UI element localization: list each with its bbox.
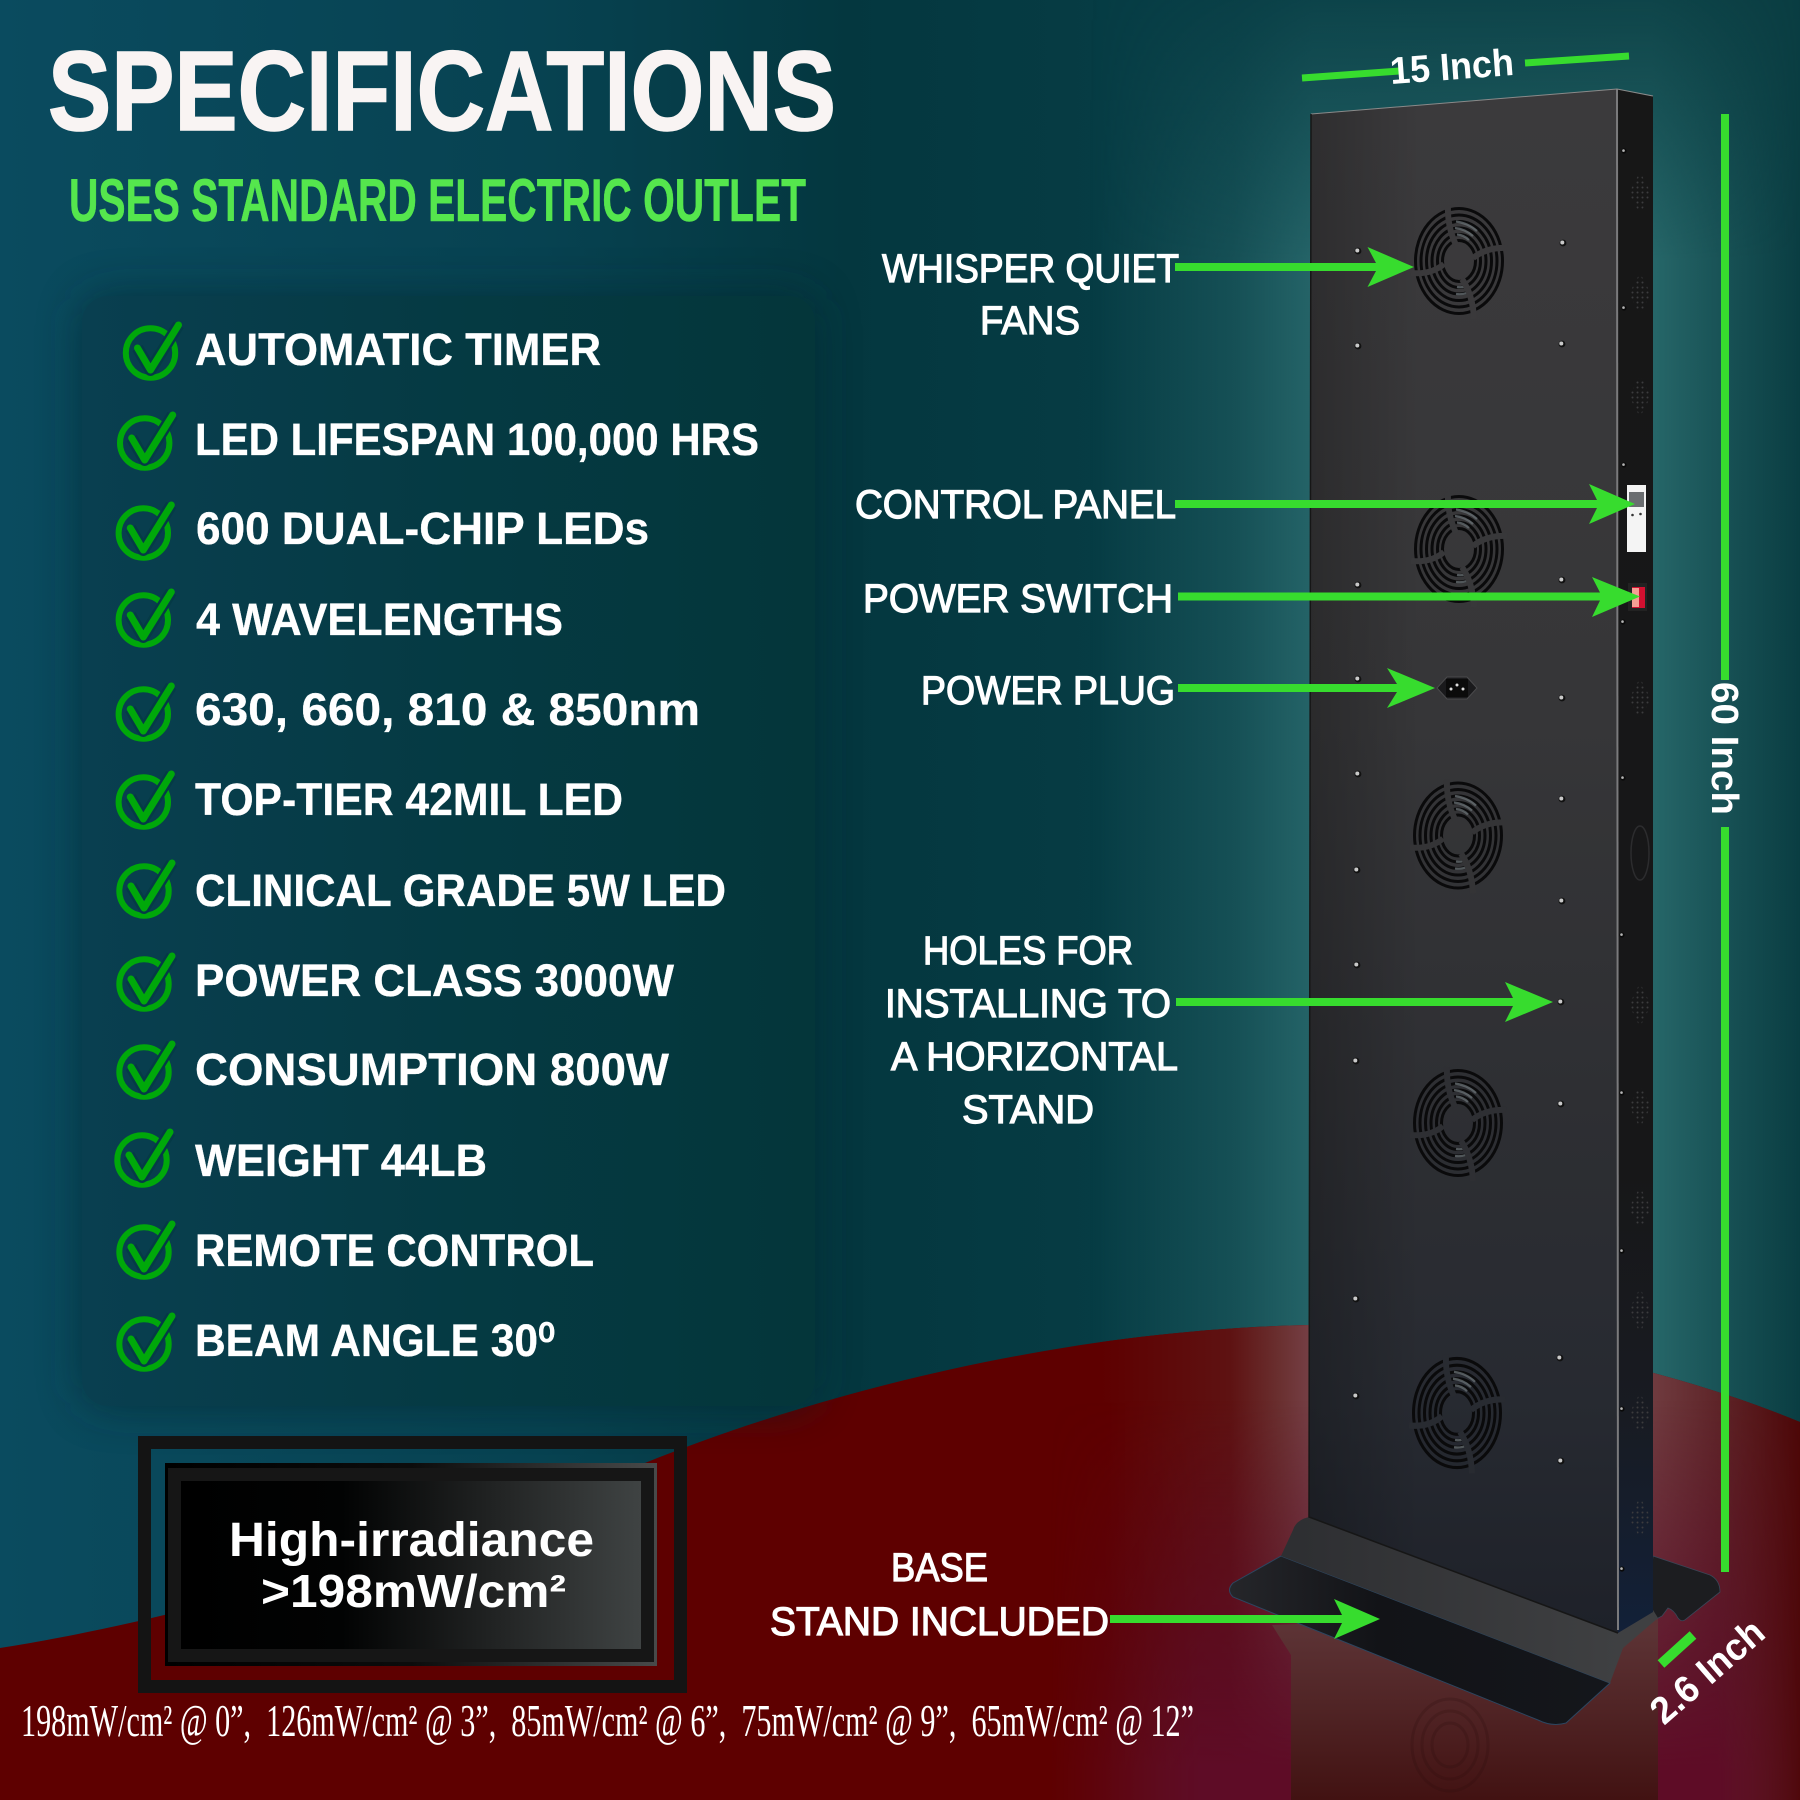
dimension: depth 2.6 inch: 2.6 Inch	[1642, 1611, 1773, 1733]
panel: specification list	[82, 296, 815, 1406]
spec: 5W LED: CLINICAL GRADE 5W LED	[195, 865, 726, 916]
arrow: fans	[1175, 247, 1414, 287]
spec: wavelengths: 4 WAVELENGTHS	[196, 594, 563, 645]
subtitle: USES STANDARD ELECTRIC OUTLET	[69, 167, 806, 234]
label: base stand: BASE	[891, 1546, 988, 1590]
power switch device	[1628, 583, 1647, 611]
spec: dual-chip LEDs: 600 DUAL-CHIP LEDs	[196, 503, 649, 554]
arrow: base	[1110, 1599, 1380, 1639]
product: LED panel on base stand	[1230, 89, 1720, 1800]
spec: remote control: REMOTE CONTROL	[195, 1225, 594, 1276]
fan 2	[1411, 493, 1507, 607]
front base foot	[1230, 1556, 1610, 1724]
callout: high irradiance box	[144, 1442, 680, 1686]
label: whisper quiet fans: FANS	[980, 299, 1080, 343]
dimension: height 60 inch: 60 Inch	[1703, 682, 1745, 815]
spec: automatic timer: AUTOMATIC TIMER	[195, 324, 601, 375]
fan 5	[1409, 1355, 1505, 1473]
side screws and vents	[1619, 148, 1651, 1572]
label: control panel: CONTROL PANEL	[855, 483, 1176, 527]
spec: weight: WEIGHT 44LB	[195, 1135, 487, 1186]
label: base stand: STAND INCLUDED	[770, 1600, 1109, 1644]
red wave background	[0, 1300, 1800, 1800]
label: holes for installing: A HORIZONTAL	[891, 1035, 1178, 1079]
label: holes for installing: STAND	[962, 1088, 1094, 1132]
title: SPECIFICATIONS	[48, 28, 836, 154]
mounting holes	[1353, 240, 1566, 1464]
arrow: control panel	[1175, 484, 1635, 524]
panel side	[1617, 89, 1653, 1633]
spec: consumption: CONSUMPTION 800W	[195, 1044, 670, 1095]
panel front face	[1309, 89, 1653, 1633]
dimension: width 15 inch	[1302, 42, 1629, 93]
callout: high irradiance box: >198mW/cm²	[261, 1565, 566, 1617]
irradiance by distance text: 198mW/cm² @ 0”, 126mW/cm² @ 3”, 85mW/cm² @ 6”, 75mW/cm² @ 9”, 65mW/cm² @ 12”	[21, 1695, 1194, 1746]
fan 1	[1411, 205, 1507, 319]
spec: LED lifespan: LED LIFESPAN 100,000 HRS	[195, 414, 759, 465]
panel reflection	[1272, 1610, 1658, 1800]
spec: beam angle: BEAM ANGLE 30⁰	[195, 1315, 555, 1366]
control panel device	[1627, 485, 1646, 552]
rear base plate	[1645, 1556, 1720, 1625]
spec: 42mil LED: TOP-TIER 42MIL LED	[195, 774, 623, 825]
spec: nanometers: 630, 660, 810 & 850nm	[195, 684, 700, 735]
label: power plug: POWER PLUG	[921, 669, 1175, 713]
power plug socket	[1437, 677, 1477, 699]
arrow: power plug	[1178, 668, 1435, 708]
label: power switch: POWER SWITCH	[863, 577, 1173, 621]
callout: high irradiance box: High-irradiance	[229, 1514, 594, 1567]
dimension: width 15 inch: 15 Inch	[1389, 42, 1515, 93]
arrow: power switch	[1178, 577, 1640, 617]
fan 4	[1410, 1067, 1506, 1181]
label: holes for installing	[885, 929, 1178, 1132]
base slanted strip	[1281, 1517, 1658, 1683]
arrow: holes	[1176, 982, 1553, 1022]
label: base stand	[770, 1546, 1109, 1644]
dimension: height 60 inch	[1703, 114, 1745, 1572]
label: holes for installing: INSTALLING TO	[885, 982, 1171, 1026]
spec: power class: POWER CLASS 3000W	[195, 955, 675, 1006]
fan 3	[1410, 780, 1506, 894]
label: whisper quiet fans	[882, 247, 1179, 343]
label: whisper quiet fans: WHISPER QUIET	[882, 247, 1179, 291]
label: holes for installing: HOLES FOR	[923, 929, 1133, 973]
